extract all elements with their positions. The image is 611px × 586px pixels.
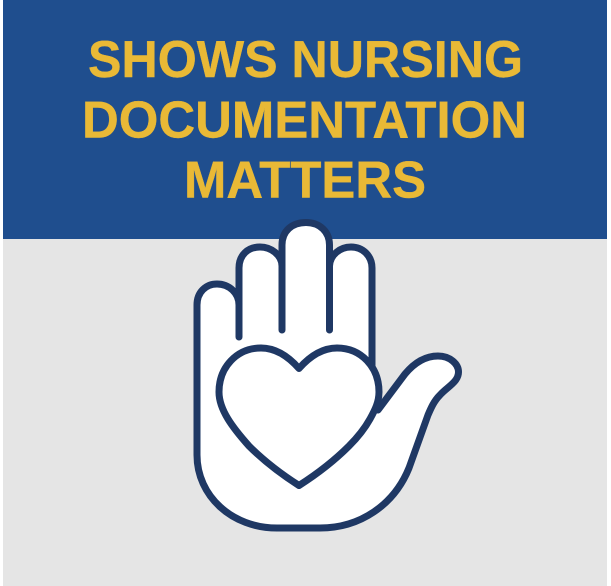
hand outline	[197, 222, 458, 528]
heart	[219, 348, 379, 486]
title: MATTERS	[184, 152, 426, 210]
title: SHOWS NURSING	[88, 31, 523, 89]
panel: blue header	[3, 0, 607, 239]
title: DOCUMENTATION	[82, 92, 527, 150]
title	[82, 31, 527, 210]
finger separators	[239, 266, 330, 337]
icon: raised hand holding heart	[197, 222, 458, 528]
panel: grey background	[3, 239, 607, 586]
